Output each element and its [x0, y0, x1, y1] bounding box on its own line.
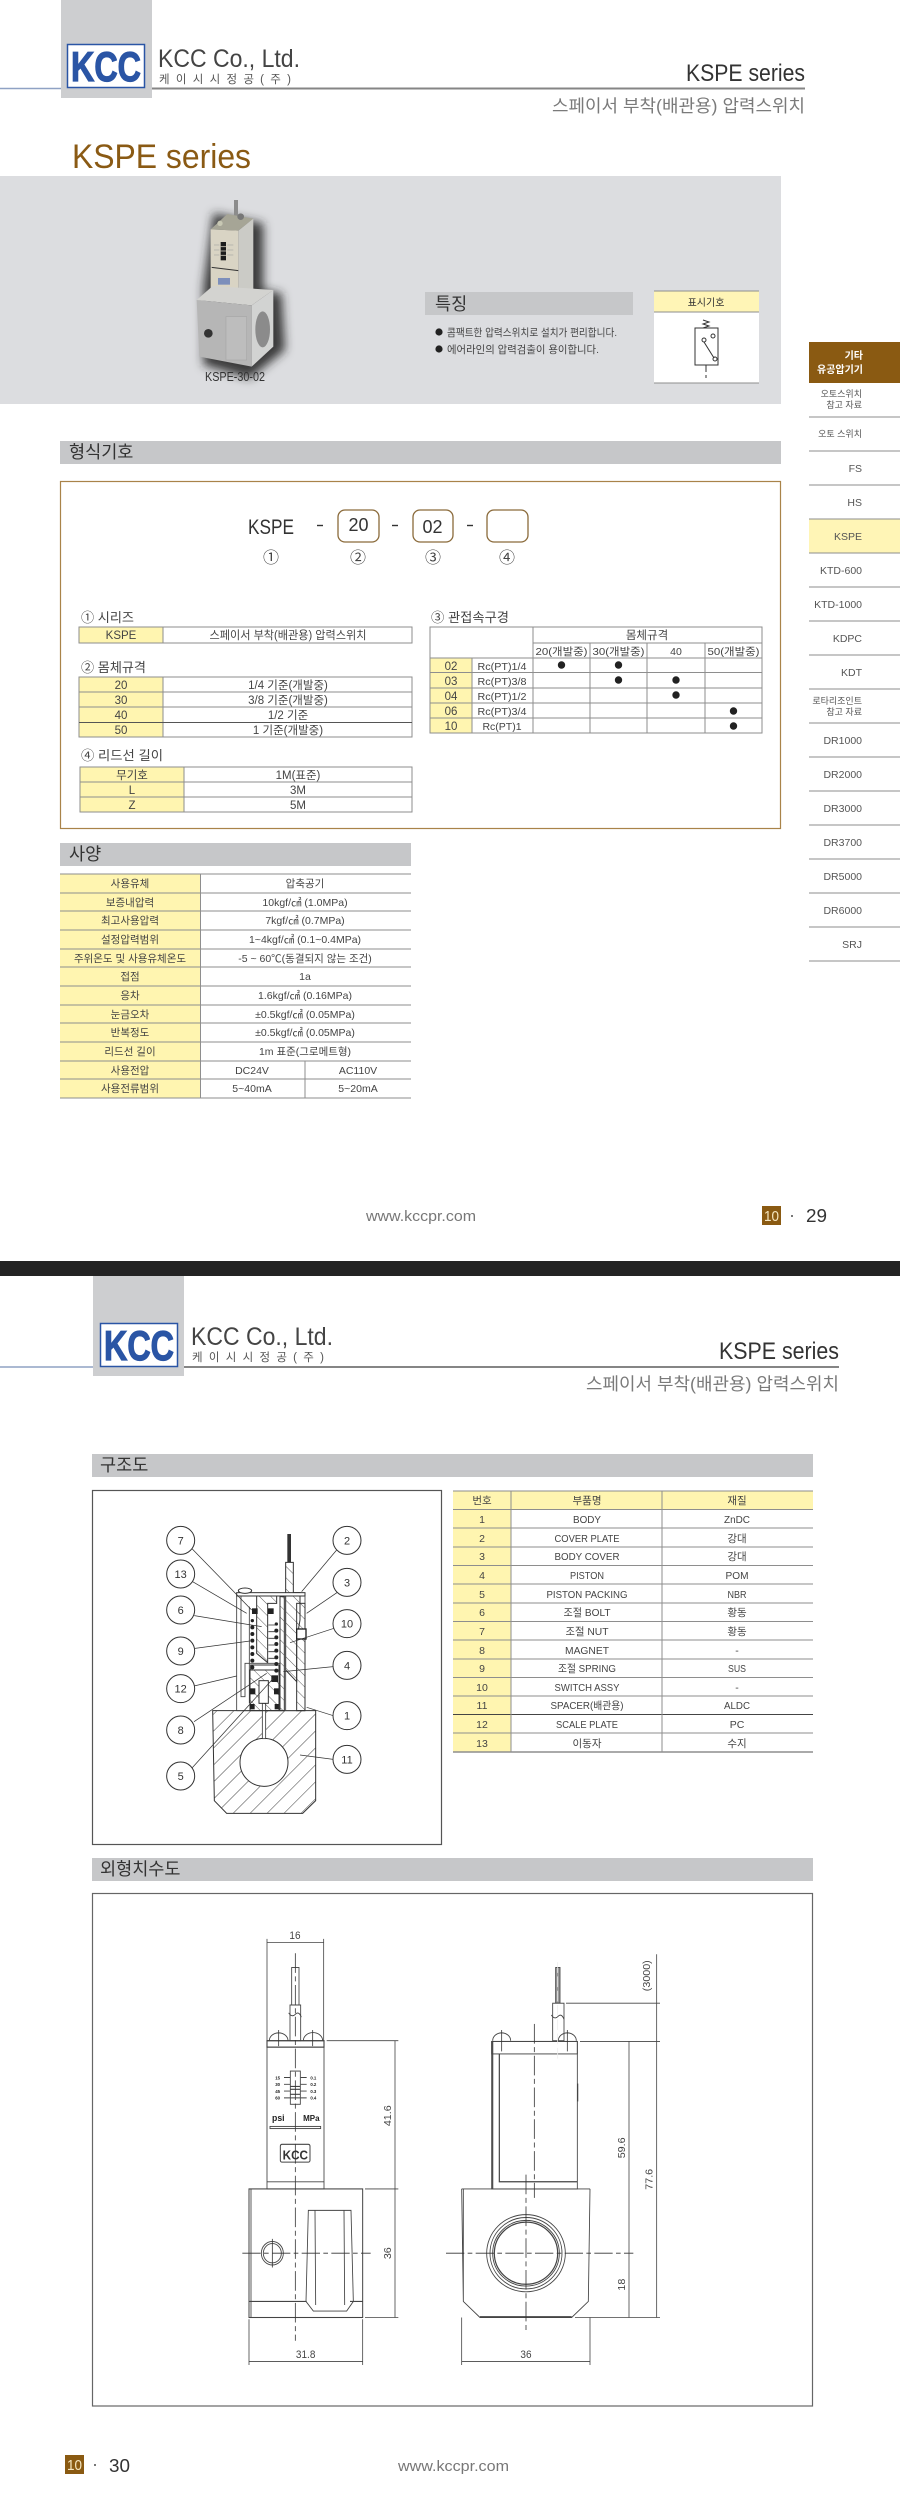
table: specifications: 1a — [299, 971, 311, 983]
page 2 footer: 30 — [109, 2456, 130, 2476]
page 1 header — [0, 0, 805, 116]
table: port size — [430, 610, 762, 733]
sidebar navigation: 오토스위치 — [821, 388, 862, 399]
page 2 footer: www.kccpr.com — [397, 2458, 509, 2475]
table: specifications: 7kgf/㎠ (0.7MPa) — [265, 915, 345, 927]
dimension lines: side view: 18 — [617, 2278, 628, 2291]
table: specifications: ±0.5kgf/㎠ (0.05MPa) — [255, 1027, 355, 1039]
page 1 footer: 29 — [806, 1206, 827, 1226]
table: specifications: DC24V — [235, 1065, 269, 1077]
table: parts list: - — [735, 1682, 739, 1694]
sidebar navigation: KTD-600 — [820, 565, 862, 577]
table: body size: 20 — [115, 680, 127, 692]
table: parts list: SWITCH ASSY — [554, 1682, 620, 1694]
dimension lines: side view: (3000) — [642, 1960, 653, 1991]
part number callouts: 7 — [178, 1535, 184, 1547]
table: parts list: - — [735, 1645, 739, 1657]
table: parts list: 조절 BOLT — [564, 1606, 611, 1619]
table: specifications: 사용유체 — [111, 878, 149, 890]
page 1 footer: 10 — [764, 1208, 779, 1225]
dimension lines: front view: 36 — [383, 2247, 394, 2259]
part number callouts: 2 — [344, 1535, 350, 1547]
table: port size: 04 — [445, 691, 458, 703]
part number callouts: 6 — [178, 1605, 184, 1617]
table: parts list: 8 — [479, 1645, 485, 1657]
cross-section: switch housing and piston — [237, 1534, 306, 1711]
dimension lines: side view: 36 — [520, 2350, 532, 2361]
table: parts list: 11 — [477, 1700, 488, 1712]
table: specifications: 응차 — [120, 990, 140, 1002]
main title: KSPE series — [72, 138, 251, 176]
table: parts list: BODY — [573, 1514, 601, 1526]
table: body size: ② 몸체규격 — [81, 660, 146, 675]
active category tab: 유공압기기 — [817, 363, 863, 376]
table: specifications: 1m 표준(그로메트형) — [259, 1046, 351, 1058]
section heading: model code — [60, 441, 781, 464]
table: parts list: 1 — [479, 1514, 485, 1526]
part number callouts — [167, 1526, 361, 1790]
sidebar navigation — [809, 342, 900, 961]
table: port size: 06 — [445, 706, 457, 718]
front view drawing: MPa — [303, 2113, 320, 2123]
table: parts list: POM — [726, 1570, 748, 1582]
table: parts list: 수지 — [727, 1738, 747, 1750]
table: parts list: SCALE PLATE — [556, 1719, 618, 1731]
table: specifications: -5 ~ 60℃(동결되지 않는 조건) — [238, 953, 372, 965]
series subtitle: 스페이서 부착(배관용) 압력스위치 — [586, 1374, 839, 1394]
sidebar navigation: 로타리조인트 — [812, 696, 862, 706]
table: specifications: 1.6kgf/㎠ (0.16MPa) — [258, 990, 352, 1002]
page 2 footer: 10 — [67, 2457, 82, 2474]
section heading: specifications: 사양 — [69, 844, 101, 864]
sidebar navigation: DR2000 — [823, 769, 862, 781]
table: port size: Rc(PT)3/8 — [478, 676, 527, 688]
section heading: structure: 구조도 — [100, 1455, 148, 1475]
front view drawing — [242, 1931, 398, 2365]
table: port size: 02 — [445, 661, 457, 673]
table: parts list: NBR — [728, 1589, 747, 1601]
side view drawing — [446, 1954, 660, 2365]
leader lines — [192, 1548, 338, 1768]
table: lead wire length: 1M(표준) — [276, 770, 321, 782]
front view drawing: 30 — [275, 2082, 281, 2087]
table: parts list: 4 — [479, 1570, 485, 1582]
front view drawing: psi — [272, 2113, 285, 2123]
model code diagram — [248, 510, 528, 567]
table: specifications: 최고사용압력 — [101, 914, 159, 927]
model code diagram: KSPE — [248, 516, 294, 539]
section heading: dimensions: 외형치수도 — [100, 1859, 180, 1879]
section heading: structure — [92, 1454, 813, 1477]
dimension lines: front view: 31.8 — [296, 2350, 316, 2361]
panel: structure drawing — [92, 1490, 442, 1844]
symbol box — [654, 291, 759, 383]
model code diagram: ③ — [425, 549, 441, 567]
table: specifications: 사용전압 — [111, 1064, 150, 1077]
sidebar navigation: KTD-1000 — [814, 599, 862, 611]
dimension lines: side view — [462, 1954, 660, 2365]
model code diagram: ① — [263, 549, 279, 567]
sidebar navigation: KDPC — [833, 633, 862, 645]
table: parts list: 이동자 — [573, 1738, 602, 1750]
part number callouts: 3 — [344, 1577, 350, 1589]
table: parts list: 조절 NUT — [566, 1625, 609, 1638]
page 2 footer — [65, 2455, 509, 2476]
table: specifications: 5~20mA — [338, 1083, 378, 1095]
front view drawing: 0.3 — [310, 2089, 317, 2094]
company name: KCC Co., Ltd. — [191, 1323, 333, 1351]
table: parts list: 3 — [479, 1551, 485, 1563]
features heading: 특징 — [435, 294, 467, 314]
table: parts list: MAGNET — [565, 1645, 610, 1657]
table: body size: 1/4 기준(개발중) — [248, 679, 328, 692]
table: specifications: 설정압력범위 — [101, 933, 159, 946]
table: body size — [79, 660, 412, 737]
series subtitle: 스페이서 부착(배관용) 압력스위치 — [552, 96, 805, 116]
page 2 header — [0, 1276, 839, 1394]
table: parts list: 6 — [479, 1607, 485, 1619]
features list — [435, 326, 617, 356]
features heading — [425, 292, 633, 315]
table: lead wire length: ④ 리드선 길이 — [81, 748, 163, 763]
part number callouts: 9 — [178, 1646, 184, 1658]
table: parts list: SUS — [728, 1663, 746, 1675]
product caption: KSPE-30-02 — [205, 369, 265, 384]
part number callouts: 1 — [344, 1711, 350, 1723]
sidebar navigation: KSPE — [834, 531, 862, 543]
table: parts list: 13 — [476, 1738, 488, 1750]
model code diagram: 02 — [422, 517, 443, 537]
table: specifications: 주위온도 및 사용유체온도 — [74, 952, 186, 965]
table: specifications — [60, 874, 411, 1098]
table: parts list: PISTON — [570, 1570, 604, 1582]
table: series: ① 시리즈 — [81, 610, 134, 625]
section heading: dimensions — [92, 1858, 813, 1881]
table: parts list: 10 — [476, 1682, 488, 1694]
page 1 footer: www.kccpr.com — [365, 1208, 476, 1225]
table: series — [79, 610, 412, 643]
table: parts list: 강대 — [727, 1551, 747, 1563]
table: parts list: 황동 — [727, 1607, 747, 1619]
sidebar navigation: DR6000 — [823, 905, 862, 917]
table: parts list: 12 — [476, 1719, 488, 1731]
table: parts list: 조절 SPRING — [558, 1662, 616, 1675]
table: parts list: ZnDC — [724, 1514, 750, 1526]
series title: KSPE series — [686, 60, 805, 87]
table: body size: 30 — [115, 695, 127, 707]
company name in Korean: 케 이 시 시 정 공 ( 주 ) — [159, 73, 291, 86]
table: body size: 40 — [115, 710, 127, 722]
symbol box: 표시기호 — [688, 297, 724, 309]
table: port size: 10 — [445, 721, 457, 733]
dimension lines: front view: 41.6 — [383, 2105, 394, 2126]
table: parts list: PC — [730, 1719, 745, 1731]
page 1 footer — [365, 1206, 827, 1226]
table: parts list: 번호 — [472, 1495, 492, 1507]
table: port size: Rc(PT)1/4 — [478, 661, 527, 673]
table: port size: Rc(PT)1/2 — [478, 691, 527, 703]
part number callouts: 12 — [175, 1684, 187, 1696]
panel: dimension drawings — [92, 1894, 812, 2406]
sidebar navigation: HS — [847, 497, 862, 509]
table: port size: 50(개발중) — [708, 646, 760, 658]
front view drawing: 15 — [275, 2075, 281, 2080]
table: parts list: 5 — [479, 1589, 485, 1601]
icon: pressure switch symbol — [695, 320, 718, 378]
table: port size: Rc(PT)3/4 — [478, 706, 527, 718]
product photo — [197, 200, 285, 378]
logo: KCC: KCC — [104, 1322, 174, 1369]
company name: KCC Co., Ltd. — [158, 45, 300, 73]
sidebar navigation: DR3000 — [823, 803, 862, 815]
front view drawing: 0.4 — [310, 2096, 317, 2101]
dimension lines: front view: 16 — [289, 1931, 301, 1942]
sidebar navigation: DR3700 — [823, 837, 862, 849]
panel: model code — [60, 482, 780, 828]
table: parts list: SPACER(배관용) — [550, 1700, 624, 1712]
part number callouts: 10 — [341, 1619, 353, 1631]
cross-section: body and spacer — [213, 1703, 316, 1813]
model code diagram: ④ — [499, 549, 515, 567]
table: specifications: 접점 — [120, 971, 140, 983]
table: port size: 30(개발중) — [592, 646, 644, 658]
table: lead wire length: 무기호 — [116, 769, 148, 782]
part number callouts: 8 — [178, 1725, 184, 1737]
model code diagram: 20 — [348, 515, 369, 535]
table: specifications: 사용전류범위 — [101, 1082, 159, 1095]
table: specifications: AC110V — [339, 1065, 377, 1077]
part number callouts: 4 — [344, 1660, 350, 1672]
table: parts list: 2 — [479, 1533, 485, 1545]
table: parts list: 부품명 — [573, 1495, 601, 1507]
features list: 콤팩트한 압력스위치로 설치가 편리합니다. — [447, 326, 617, 339]
front view drawing: 45 — [275, 2089, 281, 2094]
model code diagram: ② — [350, 549, 366, 567]
dimension lines: side view: 77.6 — [645, 2169, 656, 2190]
table: lead wire length: 5M — [290, 800, 306, 812]
table: parts list: ALDC — [724, 1700, 750, 1712]
sidebar navigation: 참고 자료 — [826, 707, 862, 717]
table: body size: 50 — [115, 725, 127, 737]
table: parts list: 재질 — [727, 1495, 747, 1507]
table: specifications: 5~40mA — [232, 1083, 272, 1095]
sidebar navigation: DR1000 — [823, 735, 862, 747]
table: parts list: PISTON PACKING — [546, 1589, 628, 1601]
table: parts list: BODY COVER — [554, 1551, 620, 1563]
table: series: 스페이서 부착(배관용) 압력스위치 — [210, 629, 366, 642]
table: port size: 20(개발중) — [536, 646, 588, 658]
table: body size: 3/8 기준(개발중) — [248, 694, 328, 707]
front view drawing: 0.1 — [310, 2075, 317, 2080]
table: parts list: 7 — [479, 1626, 485, 1638]
series title: KSPE series — [719, 1338, 839, 1365]
logo: KCC: KCC — [71, 43, 141, 90]
table: specifications: 보증내압력 — [106, 896, 154, 909]
table: specifications: 리드선 길이 — [104, 1045, 156, 1058]
front view drawing: 0.2 — [310, 2082, 317, 2087]
table: specifications: 반복정도 — [111, 1027, 150, 1039]
table: specifications: 압축공기 — [286, 877, 324, 890]
sidebar navigation: DR5000 — [823, 871, 862, 883]
table: lead wire length: Z — [128, 800, 136, 812]
section heading: specifications — [60, 843, 411, 866]
sidebar navigation: FS — [849, 463, 862, 475]
table: specifications: 눈금오차 — [111, 1009, 150, 1021]
page divider band — [0, 1261, 900, 1276]
sidebar navigation: KDT — [841, 667, 863, 679]
table: port size: ③ 관접속구경 — [431, 610, 509, 625]
table: specifications: ±0.5kgf/㎠ (0.05MPa) — [255, 1009, 355, 1021]
section heading: model code: 형식기호 — [69, 442, 133, 462]
front view drawing: KCC — [283, 2148, 308, 2162]
active category tab: 기타 — [845, 349, 863, 362]
table: parts list: COVER PLATE — [554, 1533, 620, 1545]
table: lead wire length: 3M — [290, 785, 306, 797]
sidebar navigation: 오토 스위치 — [818, 428, 862, 439]
table: parts list: 강대 — [727, 1533, 747, 1545]
table: port size: 몸체규격 — [626, 628, 668, 642]
front view drawing: 60 — [275, 2096, 281, 2101]
part number callouts: 13 — [175, 1569, 187, 1581]
dimension lines: side view: 59.6 — [617, 2137, 628, 2158]
table: parts list — [453, 1491, 813, 1752]
table: port size: 40 — [670, 646, 682, 658]
sidebar navigation: 참고 자료 — [826, 400, 862, 410]
table: series: KSPE — [106, 630, 137, 642]
table: lead wire length: L — [129, 785, 136, 797]
table: parts list: 황동 — [727, 1626, 747, 1638]
table: body size: 1 기준(개발중) — [253, 724, 323, 737]
table: lead wire length — [80, 748, 412, 812]
table: port size: Rc(PT)1 — [482, 721, 522, 733]
table: port size: 03 — [445, 676, 457, 688]
company name in Korean: 케 이 시 시 정 공 ( 주 ) — [192, 1351, 324, 1364]
part number callouts: 11 — [341, 1754, 353, 1766]
sidebar navigation: SRJ — [842, 939, 862, 951]
panel: product overview — [0, 176, 781, 404]
table: specifications: 1~4kgf/㎠ (0.1~0.4MPa) — [249, 934, 361, 946]
table: parts list: 9 — [479, 1663, 485, 1675]
active category tab — [809, 342, 900, 383]
features list: 에어라인의 압력검출이 용이합니다. — [447, 343, 599, 356]
table: body size: 1/2 기준 — [268, 709, 308, 722]
dimension lines: front view — [249, 1931, 398, 2365]
part number callouts: 5 — [178, 1771, 184, 1783]
table: specifications: 10kgf/㎠ (1.0MPa) — [262, 897, 348, 909]
